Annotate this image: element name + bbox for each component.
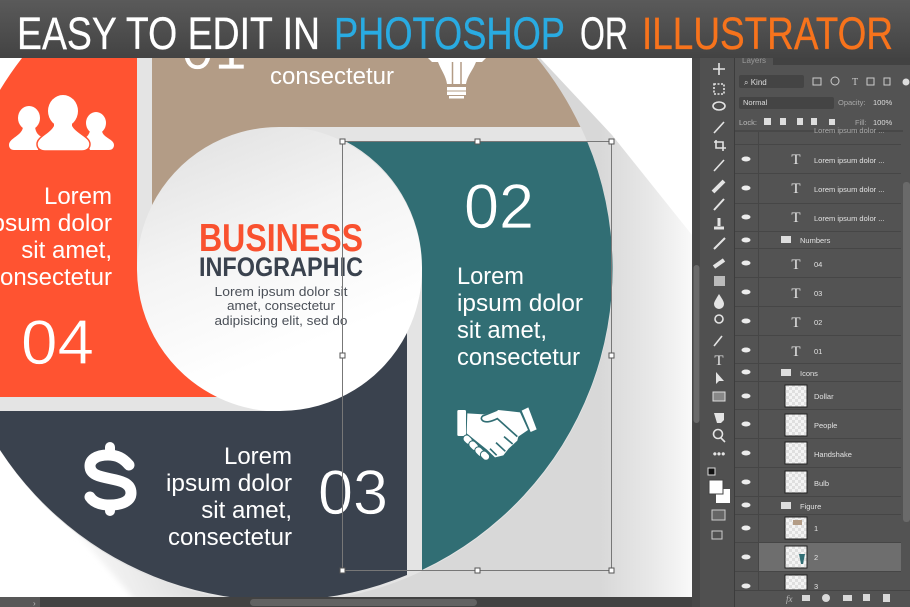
layer names: 3 [814,582,818,591]
icon: people [9,95,114,151]
center circle [137,126,422,412]
top banner [0,0,910,59]
layer names: Lorem ipsum dolor ... [814,156,884,165]
text: lorem ipsum [166,443,292,551]
layer names: Lorem ipsum dolor ... [814,126,884,135]
layer names: Figure [800,502,821,511]
number 03: 03 [318,458,388,528]
filter row: T [852,77,858,88]
icon: light bulb [428,58,486,98]
photoshop tools bar [700,50,735,607]
panel footer [735,590,910,607]
canvas background [0,58,692,597]
blend mode row: Normal [743,98,768,107]
layer names: 03 [814,289,822,298]
text: lorem ipsum: ipsum dolor [166,470,292,497]
layer names: Handshake [814,450,852,459]
text: lorem ipsum: consectetur [168,524,292,551]
segment 02: teal [345,141,613,570]
visibility eyes [742,156,750,588]
layer names: Bulb [814,479,829,488]
layer names: 02 [814,318,822,327]
panel footer: fx [786,594,793,604]
banner text: or: OR [580,8,628,59]
banner text: easy to edit in: EASY TO EDIT IN [17,8,320,59]
selection box with handles [340,139,614,573]
layer names: 01 [814,347,822,356]
lock row: 100% [873,118,893,127]
type layer icons: T [791,315,801,331]
blend mode row: Opacity: [838,98,866,107]
layer names: 1 [814,524,818,533]
center title [199,217,363,328]
layer names: Numbers [800,236,831,245]
photoshop tools bar: T [714,353,724,369]
type layer icons [791,152,801,360]
text: lorem ipsum: sit amet, [201,497,292,524]
blend mode row: 100% [873,98,893,107]
folder icons [781,236,791,509]
layer names: Icons [800,369,818,378]
text: description: amet, consectetur [227,298,336,313]
filter row [739,75,910,88]
type layer icons: T [791,181,801,197]
segment 01: tan [152,13,580,205]
type layer icons: T [791,344,801,360]
type layer icons: T [791,210,801,226]
layer thumbnails [785,385,807,590]
panel scrollbar [903,182,910,522]
photoshop tools bar: ••• [713,447,725,461]
type layer icons: T [791,152,801,168]
text: lorem ipsum: Lorem [457,263,524,290]
segment 04: orange [0,58,217,397]
filter row: ⌕ Kind [744,78,767,87]
number 04: 04 [21,308,94,378]
layer names: 2 [814,553,818,562]
heading: infographic: INFOGRAPHIC [199,252,363,282]
text: description [214,284,348,328]
long shadows behind figure [0,58,686,597]
heading: business: BUSINESS [199,217,363,260]
lock row [739,118,893,127]
layer names [800,126,884,591]
row dividers [735,132,901,590]
icon: dollar [90,447,131,511]
layer names: Lorem ipsum dolor ... [814,214,884,223]
layer names: Lorem ipsum dolor ... [814,185,884,194]
segment 03: dark [0,333,407,601]
text: lorem ipsum [0,183,112,291]
lock row: Fill: [855,118,867,127]
layers panel [735,50,910,607]
layer names: 04 [814,260,822,269]
lock row: Lock: [739,118,757,127]
layer names: People [814,421,837,430]
text: description: Lorem ipsum dolor sit [214,284,348,299]
thumbnail figures [793,520,805,564]
banner text: photoshop: PHOTOSHOP [334,8,565,59]
number 02: 02 [464,172,534,242]
icon: handshake [457,407,537,462]
text: lorem ipsum: Lorem [44,183,112,210]
canvas scrollbars [0,58,700,607]
panel tab: layers: Layers [742,56,766,65]
text: lorem ipsum: sit amet, [21,237,112,264]
blend mode row [739,97,893,109]
text: lorem ipsum: Lorem [224,443,292,470]
selected layer highlight [758,543,901,571]
text: consectetur: consectetur [270,63,394,90]
type layer icons: T [791,257,801,273]
number 01: 01 [181,13,247,83]
text: description: adipisicing elit, sed do [214,313,348,328]
type layer icons: T [791,286,801,302]
layer names: Dollar [814,392,834,401]
text: lorem ipsum: consectetur [457,344,580,371]
text: lorem ipsum: ipsum dolor [457,290,583,317]
text: lorem ipsum [457,263,583,371]
text: lorem ipsum: sit amet, [457,317,547,344]
